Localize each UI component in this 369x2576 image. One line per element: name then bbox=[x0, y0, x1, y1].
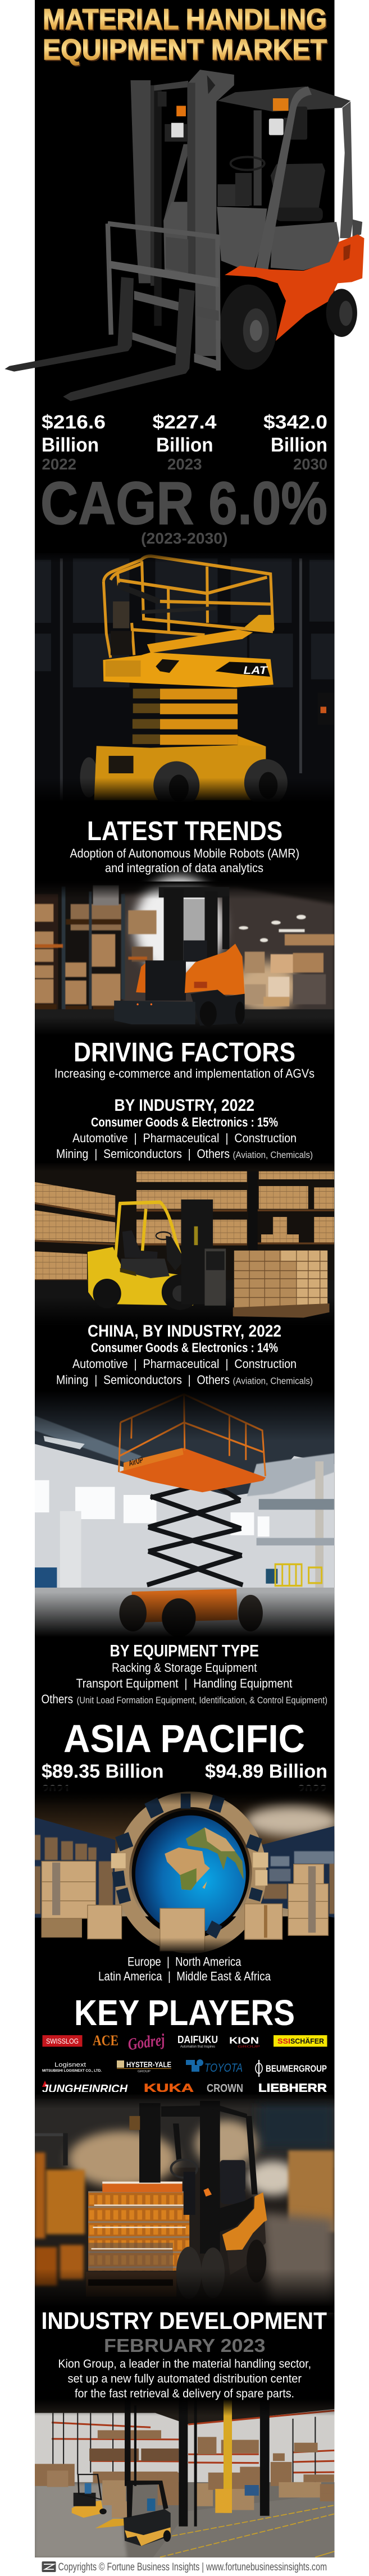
market size 2023: 2023 bbox=[167, 455, 202, 473]
development description bbox=[58, 2358, 311, 2400]
development description: Kion Group, a leader in the material handling sector, bbox=[58, 2358, 311, 2370]
market size 2030 bbox=[263, 412, 327, 473]
image: forklift with bottled goods bbox=[35, 2092, 334, 2313]
segment: China by industry 2022: Automotive | Pharmaceutical | Construction bbox=[72, 1357, 297, 1371]
segment: China by industry 2022: Consumer Goods & Electronics : 14% bbox=[91, 1340, 278, 1355]
logo: Logisnext: Logisnext bbox=[54, 2062, 86, 2068]
logo: Toyota: TOYOTA bbox=[204, 2062, 243, 2075]
segment: by industry 2022: Automotive | Pharmaceutical | Construction bbox=[72, 1131, 297, 1145]
other regions: Latin America | Middle East & Africa bbox=[98, 1969, 271, 1984]
market size 2022: $216.6 bbox=[42, 412, 106, 433]
title bbox=[43, 3, 327, 66]
logo: SSI Schaefer: SSI bbox=[277, 2037, 290, 2045]
segment: by industry 2022: Consumer Goods & Electronics : 15% bbox=[91, 1115, 278, 1129]
segment: by industry 2022: Mining | Semiconductors | Others bbox=[56, 1147, 230, 1161]
logo: Hyster-Yale: HYSTER-YALE bbox=[126, 2060, 171, 2069]
logo: KUKA: KUKA bbox=[144, 2082, 194, 2095]
asia pacific value 2022: 2022 bbox=[298, 1782, 327, 1798]
image: yellow scissor lift bbox=[35, 550, 334, 810]
latest trends text: Adoption of Autonomous Mobile Robots (AMR) bbox=[70, 846, 299, 860]
market size 2022 bbox=[42, 412, 106, 473]
logo: Hyster-Yale: GROUP bbox=[138, 2070, 151, 2073]
segment: by equipment type: Transport Equipment | Handling Equipment bbox=[76, 1676, 292, 1690]
development description: set up a new fully automated distribution center bbox=[67, 2372, 302, 2386]
segment: by equipment type: Racking & Storage Equipment bbox=[112, 1661, 257, 1675]
logo: SSI Schaefer: SCHÄFER bbox=[290, 2037, 324, 2045]
illustration: orange forklift bbox=[4, 70, 364, 401]
latest trends heading: LATEST TRENDS bbox=[87, 817, 283, 846]
logo: Swisslog bbox=[43, 2035, 82, 2046]
segment: by equipment type: (Unit Load Formation Equipment, Identification, & Control Equipment) bbox=[76, 1695, 327, 1706]
market size 2022: Billion bbox=[42, 434, 99, 456]
market size 2023 bbox=[153, 412, 217, 473]
other regions bbox=[98, 1954, 271, 1984]
segment: by equipment type: Others bbox=[42, 1692, 73, 1706]
logo: Beumer Group bbox=[256, 2060, 327, 2077]
market size 2023: $227.4 bbox=[153, 412, 217, 433]
logo: Crown: CROWN bbox=[207, 2082, 243, 2095]
logo: Logisnext bbox=[42, 2062, 102, 2073]
logo: SSI Schaefer bbox=[274, 2035, 327, 2046]
market size 2030: 2030 bbox=[293, 455, 327, 473]
image: yellow forklift with boxes bbox=[35, 1161, 334, 1324]
driving factors heading: DRIVING FACTORS bbox=[74, 1038, 295, 1068]
industry development heading: INDUSTRY DEVELOPMENT bbox=[42, 2308, 327, 2335]
logo: Logisnext: MITSUBISHI LOGISNEXT CO., LTD. bbox=[42, 2069, 102, 2073]
market size 2030: Billion bbox=[271, 434, 327, 456]
development date: FEBRUARY 2023 bbox=[104, 2335, 265, 2356]
CAGR: (2023-2030) bbox=[141, 530, 228, 547]
key players heading: KEY PLAYERS bbox=[74, 1993, 295, 2033]
icon: brand mark bbox=[42, 2561, 56, 2572]
logo: Jungheinrich: JUNGHEINRICH bbox=[42, 2083, 128, 2095]
segment: by industry 2022 bbox=[56, 1096, 313, 1161]
market size 2023: Billion bbox=[156, 434, 213, 456]
segment: by industry 2022: BY INDUSTRY, 2022 bbox=[115, 1096, 254, 1115]
footer bbox=[42, 2561, 327, 2573]
segment: China by industry 2022: (Aviation, Chemicals) bbox=[233, 1376, 313, 1386]
driving factors text: Increasing e-commerce and implementation of AGVs bbox=[54, 1066, 315, 1080]
logo: Liebherr: LIEBHERR bbox=[258, 2082, 327, 2095]
logo: Daifuku: Automation that Inspires bbox=[180, 2045, 215, 2049]
segment: China by industry 2022: Mining | Semiconductors | Others bbox=[56, 1373, 230, 1387]
title: EQUIPMENT MARKET bbox=[43, 34, 327, 66]
segment: by industry 2022: (Aviation, Chemicals) bbox=[233, 1150, 313, 1160]
segment: by equipment type: BY EQUIPMENT TYPE bbox=[110, 1642, 259, 1660]
other regions: Europe | North America bbox=[127, 1954, 242, 1969]
logo: KION: KION bbox=[229, 2035, 259, 2046]
title: MATERIAL HANDLING bbox=[43, 3, 327, 36]
image: yellow scissor lift: LAT bbox=[244, 664, 268, 676]
image: orange scissor lift bbox=[35, 1390, 334, 1650]
asia pacific value 2022 bbox=[205, 1761, 327, 1798]
CAGR: CAGR 6.0% bbox=[40, 469, 327, 537]
logo: ACE: ACE bbox=[93, 2032, 119, 2049]
logo: Godrej: Godrej bbox=[127, 2030, 166, 2054]
company logos bbox=[42, 2030, 327, 2095]
logo: Beumer Group: BEUMERGROUP bbox=[266, 2063, 327, 2074]
segment: China by industry 2022 bbox=[56, 1322, 313, 1387]
development description: for the fast retrieval & delivery of spare parts. bbox=[75, 2387, 294, 2400]
market size 2030: $342.0 bbox=[263, 412, 327, 433]
segment: by equipment type bbox=[42, 1642, 327, 1706]
asia pacific value 2021: 2021 bbox=[42, 1782, 71, 1798]
logo: Daifuku: DAIFUKU bbox=[177, 2034, 218, 2045]
logo: Hyster-Yale bbox=[117, 2060, 171, 2073]
asia pacific heading: ASIA PACIFIC bbox=[63, 1717, 305, 1761]
latest trends text bbox=[70, 846, 299, 875]
asia pacific value 2021: $89.35 Billion bbox=[42, 1761, 164, 1782]
asia pacific value 2021 bbox=[42, 1761, 164, 1798]
segment: China by industry 2022: CHINA, BY INDUSTRY, 2022 bbox=[88, 1322, 281, 1341]
market size 2022: 2022 bbox=[42, 455, 76, 473]
logo: Toyota bbox=[186, 2059, 243, 2075]
logo: KION: GROUP bbox=[238, 2045, 261, 2049]
logo: KION bbox=[229, 2035, 261, 2049]
logo: Swisslog: SWISSLOG bbox=[46, 2037, 79, 2045]
image: warehouse with orange forklift bbox=[35, 877, 334, 1036]
image: orange scissor lift: AirUP bbox=[128, 1455, 144, 1468]
latest trends text: and integration of data analytics bbox=[105, 861, 263, 875]
asia pacific value 2022: $94.89 Billion bbox=[205, 1761, 327, 1782]
image: warehouse floor with forklifts bbox=[35, 2399, 335, 2557]
image: globe with boxes bbox=[35, 1786, 339, 1955]
